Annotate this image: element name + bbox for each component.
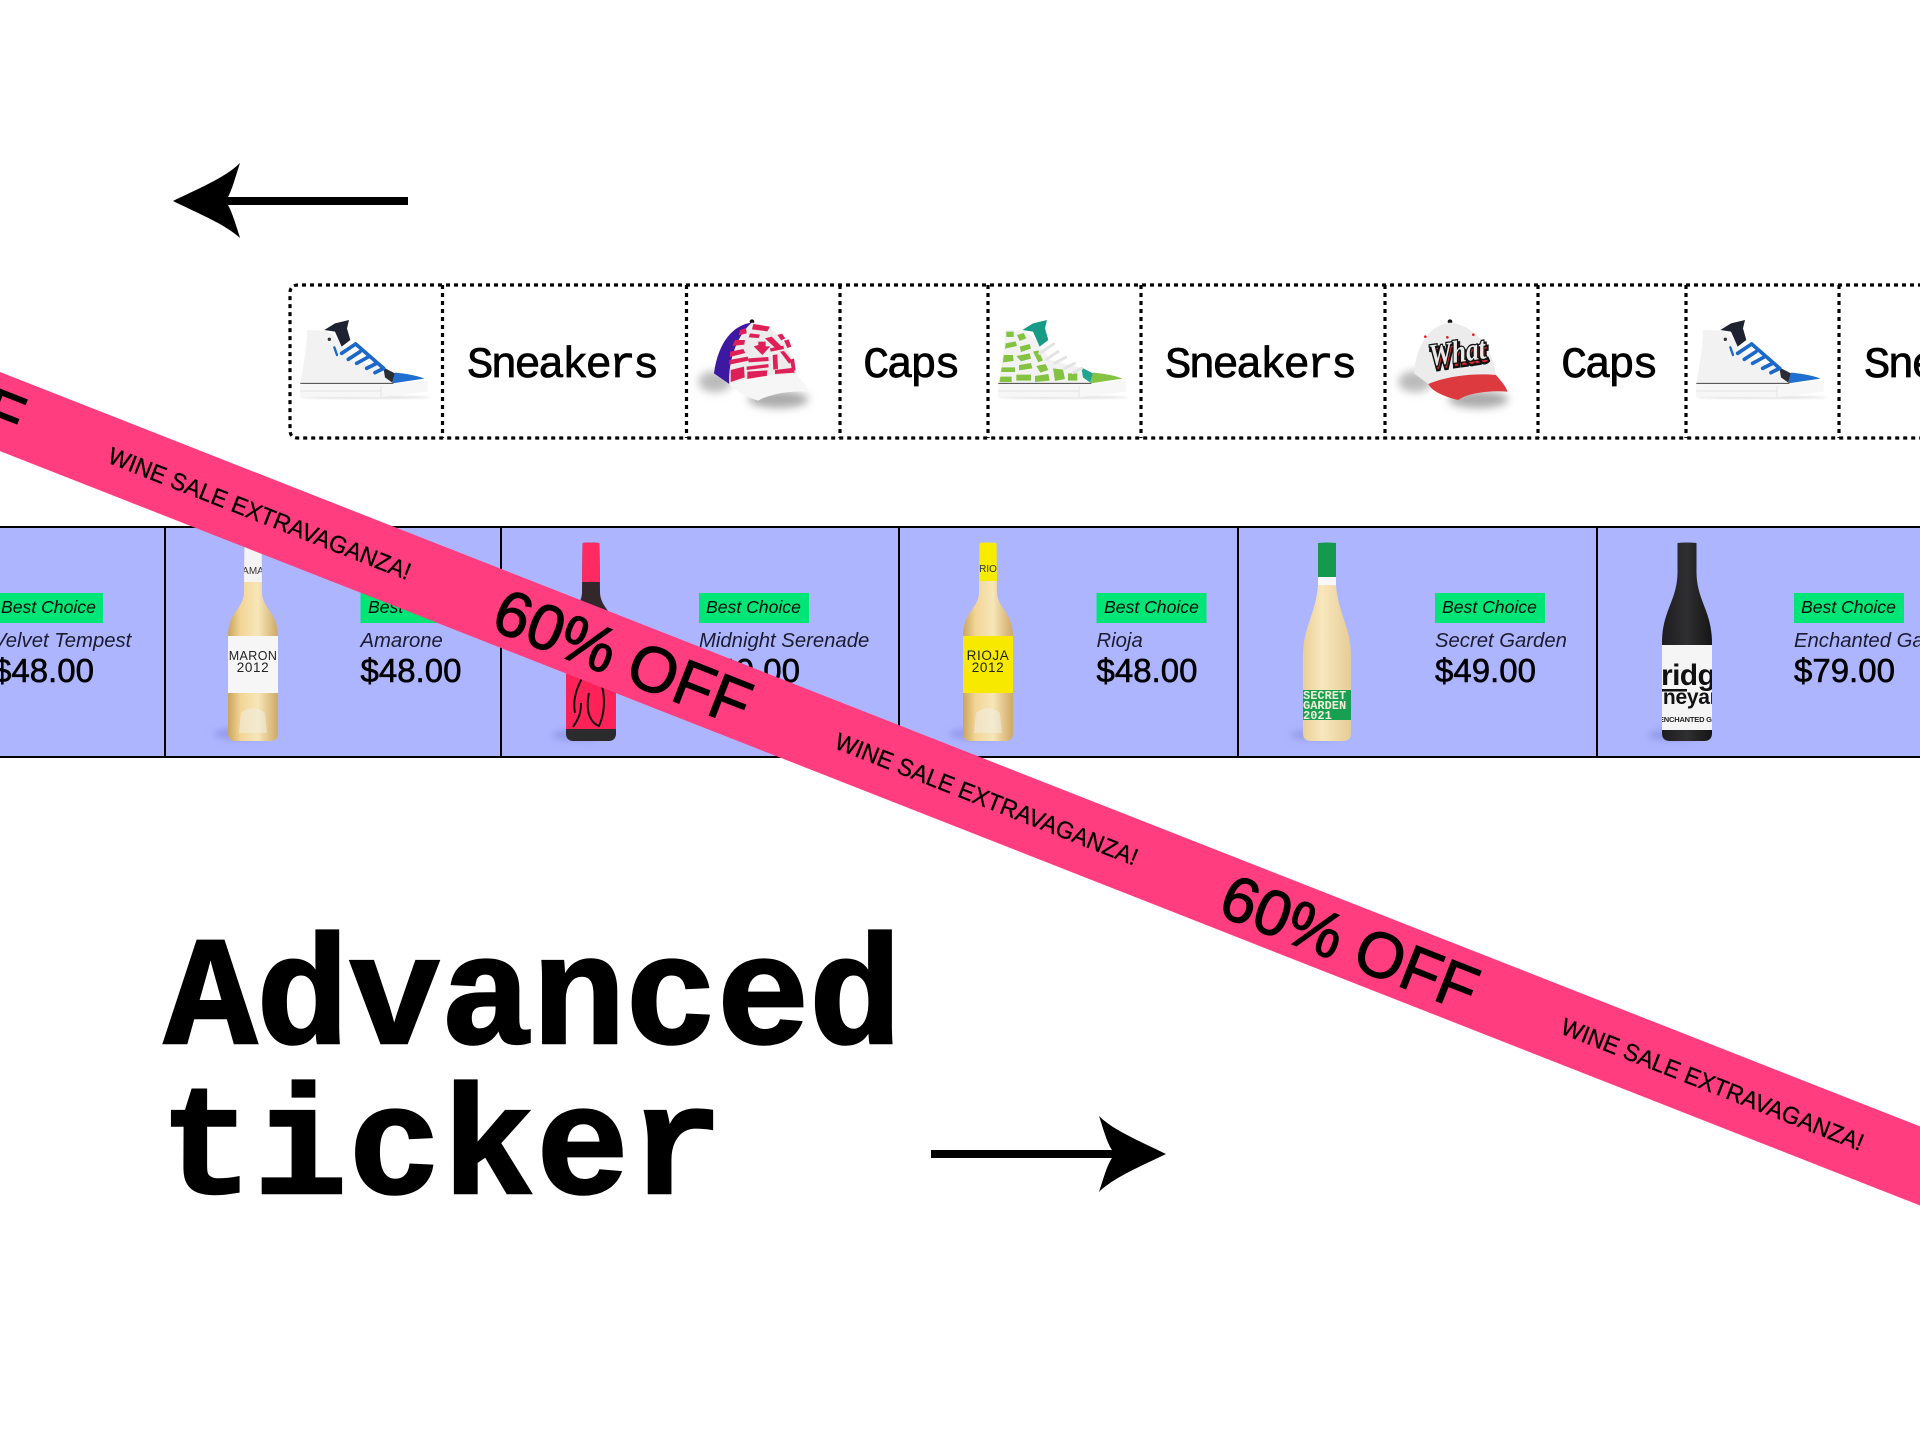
title: Advanced	[164, 914, 901, 1090]
image: white and red cap	[1398, 319, 1508, 408]
image: white and red cap: What	[1428, 334, 1490, 376]
ticker band	[0, 527, 1920, 757]
product: Enchanted Garden: ridge	[1661, 659, 1731, 692]
product: Rioja: Rioja	[1096, 630, 1143, 652]
product: Amarone: Best Choice	[368, 597, 463, 617]
label: Caps: Caps	[863, 341, 958, 391]
product: Rioja: $48.00	[1096, 652, 1197, 689]
product: Midnight Serenade: Best Choice	[706, 597, 801, 617]
product: Enchanted Garden: Best Choice	[1801, 597, 1896, 617]
product: Secret Garden: Secret Garden	[1435, 630, 1567, 652]
image: white and red cap: What	[1427, 330, 1489, 373]
product: Velvet Tempest	[0, 593, 133, 689]
product: Rioja: 2012	[972, 660, 1004, 675]
label: Sneakers: Sneakers	[467, 341, 657, 391]
arrow: left	[173, 163, 408, 238]
diagonal sale ribbon	[0, 287, 1920, 1282]
ribbon text: wine sale: WINE SALE EXTRAVAGANZA!	[831, 728, 1142, 871]
product: Amarone: Amarone	[360, 630, 443, 652]
product: Enchanted Garden: $79.00	[1794, 652, 1895, 689]
product: Enchanted Garden: vineyard	[1646, 686, 1730, 709]
product: Rioja: RIOJA	[967, 648, 1009, 663]
title: ticker	[160, 1064, 724, 1240]
product: Enchanted Garden: ENCHANTED GARDEN	[1659, 715, 1737, 724]
product: Amarone: 2012	[237, 660, 269, 675]
arrow: right	[931, 1116, 1166, 1192]
product: Rioja: Best Choice	[1104, 597, 1199, 617]
product: Rioja	[949, 541, 1206, 741]
product: Secret Garden: 2021	[1303, 709, 1332, 723]
product: Velvet Tempest: Best Choice	[1, 597, 96, 617]
product: Amarone: $48.00	[360, 652, 461, 689]
ribbon text: wine sale: WINE SALE EXTRAVAGANZA!	[1557, 1013, 1868, 1157]
ribbon band	[0, 335, 1920, 1282]
product: Midnight Serenade	[552, 541, 869, 743]
label: Caps: Caps	[1561, 341, 1656, 391]
product: Enchanted Garden	[1646, 542, 1920, 741]
product: Secret Garden: $49.00	[1435, 652, 1536, 689]
product: Amarone: AMA	[242, 566, 264, 577]
ticker frame	[290, 285, 1920, 438]
product: Secret Garden: Best Choice	[1442, 597, 1537, 617]
product: Secret Garden	[1290, 541, 1567, 741]
ticker: sneakers and caps	[290, 285, 1920, 438]
image: pink and purple cap	[698, 319, 808, 408]
product: Midnight Serenade: $49.00	[699, 652, 800, 689]
product: Amarone	[214, 541, 470, 741]
product: Amarone: AMARONE	[220, 649, 286, 663]
image: blue sneaker repeat	[1696, 320, 1826, 399]
cell dividers	[165, 527, 1597, 757]
page canvas	[0, 163, 1920, 1206]
product: Rioja: RIO	[979, 564, 997, 575]
image: green pattern sneaker	[998, 320, 1128, 399]
ribbon text: wine sale: WINE SALE EXTRAVAGANZA!	[104, 443, 415, 586]
image: blue sneaker	[300, 320, 430, 399]
label: Sneakers: Sneakers	[1165, 341, 1355, 391]
ticker: wine products	[0, 527, 1920, 757]
product: Secret Garden: GARDEN	[1303, 699, 1346, 713]
ribbon text: 60% OFF: 60% OFF	[1211, 860, 1488, 1026]
product: Secret Garden: SECRET	[1303, 689, 1346, 703]
ribbon text: 60% OFF: 60% OFF	[484, 575, 762, 740]
product: Midnight Serenade: Midnight Serenade	[699, 630, 869, 652]
